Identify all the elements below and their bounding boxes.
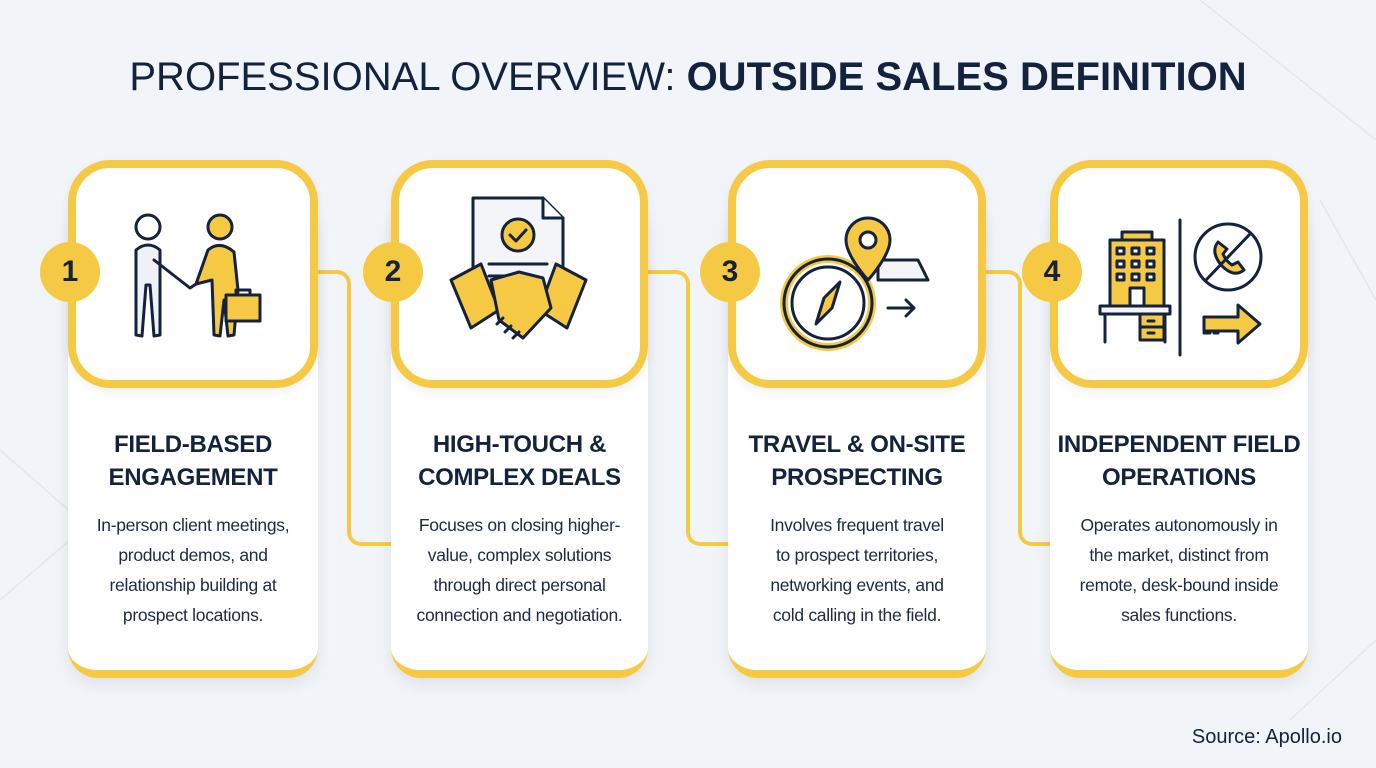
text 3: Involves frequent travel <box>770 515 944 535</box>
text 2: value, complex solutions <box>428 545 611 565</box>
text 4: Operates autonomously in <box>1080 515 1278 535</box>
heading 1: FIELD-BASED <box>114 431 272 458</box>
heading 4: OPERATIONS <box>1102 464 1256 491</box>
connector 2-3 <box>648 270 728 546</box>
badge 2 <box>363 242 423 302</box>
text 3: to prospect territories, <box>776 545 938 565</box>
text 2: Focuses on closing higher- <box>419 515 620 535</box>
text 1: product demos, and <box>118 545 268 565</box>
heading 2: COMPLEX DEALS <box>418 464 621 491</box>
connector 1-2 <box>318 270 391 546</box>
heading 2 <box>418 431 621 491</box>
text 3: cold calling in the field. <box>773 605 941 625</box>
badge 2: 2 <box>385 255 401 288</box>
badge 1: 1 <box>62 255 78 288</box>
text 4 <box>1080 515 1278 625</box>
text 2 <box>417 515 622 625</box>
icon: handshake people <box>134 214 262 338</box>
badge 4: 4 <box>1044 255 1060 288</box>
heading 1 <box>108 431 278 491</box>
text 4: the market, distinct from <box>1089 545 1269 565</box>
panel: card 3 <box>700 160 990 685</box>
heading 3 <box>748 431 966 491</box>
icon: contract handshake <box>449 196 588 340</box>
heading 3: PROSPECTING <box>771 464 943 491</box>
badge 3 <box>700 242 760 302</box>
text 4: sales functions. <box>1121 605 1237 625</box>
text 3: networking events, and <box>770 575 944 595</box>
badge 4 <box>1022 242 1082 302</box>
text 1: In-person client meetings, <box>97 515 289 535</box>
icon: compass and map pin <box>780 216 930 351</box>
badge 3: 3 <box>722 255 738 288</box>
text 1 <box>97 515 289 625</box>
heading 2: HIGH-TOUCH & <box>433 431 606 458</box>
heading 3: TRAVEL & ON-SITE <box>748 431 966 458</box>
text 4: remote, desk-bound inside <box>1080 575 1278 595</box>
heading 4: INDEPENDENT FIELD <box>1058 431 1300 458</box>
text 2: through direct personal <box>433 575 606 595</box>
text 1: prospect locations. <box>123 605 263 625</box>
panel: card 1 <box>40 160 322 685</box>
source: Source: Apollo.io <box>1192 726 1342 748</box>
connector 3-4 <box>986 270 1050 546</box>
heading 4 <box>1058 431 1300 491</box>
icon: office desk and no phone <box>1098 218 1262 356</box>
panel: card 2 <box>363 160 652 685</box>
text 1: relationship building at <box>110 575 276 595</box>
heading 1: ENGAGEMENT <box>108 464 278 491</box>
title: PROFESSIONAL OVERVIEW: OUTSIDE SALES DEFINITION <box>129 55 1247 99</box>
panel: card 4 <box>1022 160 1312 685</box>
text 3 <box>770 515 944 625</box>
badge 1 <box>40 242 100 302</box>
text 2: connection and negotiation. <box>417 605 622 625</box>
